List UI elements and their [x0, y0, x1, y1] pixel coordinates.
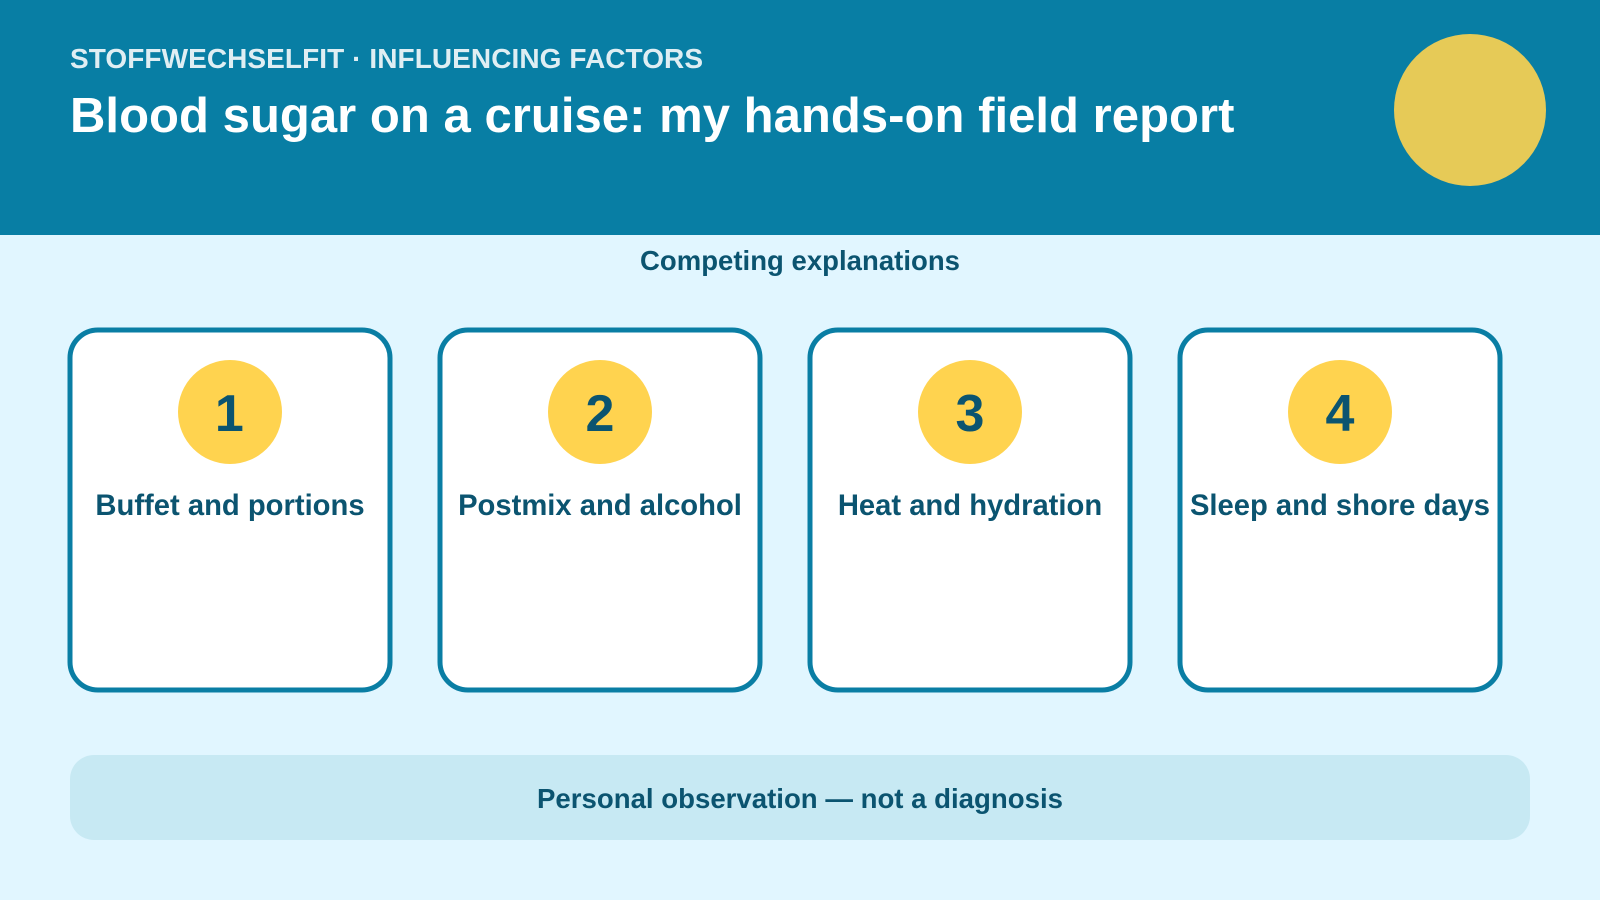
number 3: 3: [956, 385, 984, 443]
header band: [0, 0, 1600, 235]
eyebrow: STOFFWECHSELFIT · INFLUENCING FACTORS: [70, 43, 703, 74]
section heading: Competing explanations: [640, 245, 960, 276]
panel: card 3: [810, 330, 1130, 690]
icon: sun: [1394, 34, 1546, 186]
card title 1: Buffet and portions: [95, 490, 365, 522]
footer text: Personal observation — not a diagnosis: [537, 783, 1063, 814]
panel: card 2: [440, 330, 760, 690]
panel: card 1: [70, 330, 390, 690]
number badge 4: [1288, 360, 1392, 464]
card title 2: Postmix and alcohol: [458, 490, 742, 522]
title: Blood sugar on a cruise: my hands-on field report: [70, 89, 1234, 143]
number badge 2: [548, 360, 652, 464]
number badge 1: [178, 360, 282, 464]
number badge 3: [918, 360, 1022, 464]
panel: card 4: [1180, 330, 1500, 690]
card title 4: Sleep and shore days: [1190, 490, 1490, 522]
footer callout: [70, 755, 1530, 840]
card title 3: Heat and hydration: [838, 490, 1102, 522]
number 2: 2: [586, 385, 614, 443]
number 1: 1: [215, 385, 244, 443]
number 4: 4: [1326, 385, 1355, 443]
